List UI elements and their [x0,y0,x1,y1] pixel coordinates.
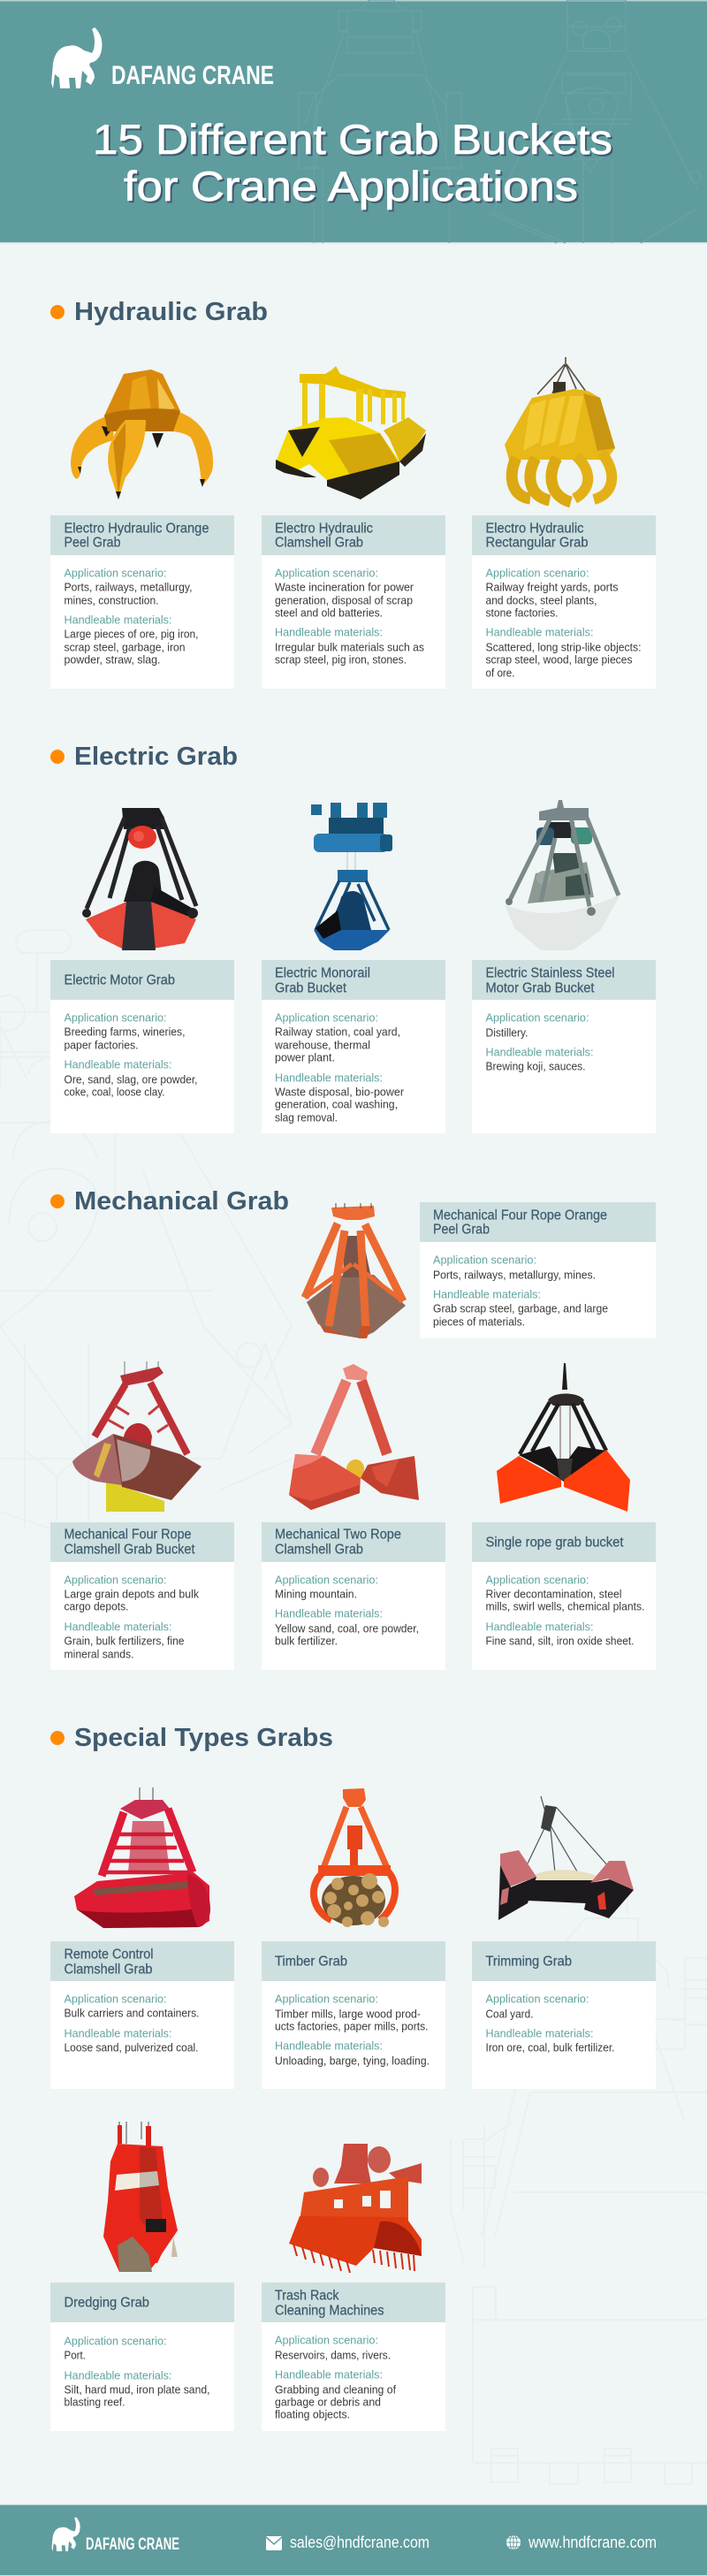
application scenario: Large grain depots and bulk [64,1588,199,1600]
card header [50,2283,234,2322]
application scenario: cargo depots. [64,1600,129,1612]
application scenario: Application scenario: [486,566,589,580]
handleable materials: Handleable materials: [275,2039,383,2053]
card header: Motor Grab Bucket [486,981,595,995]
illustration: remote control clamshell grab [74,1787,210,1928]
icon: globe [506,2535,521,2549]
card header [262,1941,445,1981]
application scenario: Reservoirs, dams, rivers. [275,2348,391,2362]
handleable materials: scrap steel, pig iron, stones. [275,652,407,667]
application scenario: Timber mills, large wood prod- [275,2007,421,2021]
handleable materials: Iron ore, coal, bulk fertilizer. [486,2040,615,2054]
application scenario [275,1993,428,2033]
card: Electro Hydraulic Clamshell Grab [262,515,445,689]
application scenario [486,1011,589,1040]
card header: Trash Rack [275,2288,339,2304]
application scenario [64,1574,199,1612]
card header: Electro Hydraulic Orange [64,522,209,536]
handleable materials: Ore, sand, slag, ore powder, [64,1073,198,1086]
card header: Electro Hydraulic [275,522,373,536]
card header: Mechanical Four Rope Orange [433,1208,607,1223]
application scenario: River decontamination, steel [486,1588,622,1600]
handleable materials: pieces of materials. [433,1315,525,1328]
application scenario: Waste incineration for power [275,580,414,594]
card header [262,1522,445,1562]
application scenario: mills, swirl wells, chemical plants. [486,1600,645,1612]
handleable materials [64,2026,198,2054]
card header: Electro Hydraulic [486,522,584,536]
application scenario: Application scenario: [486,1993,589,2005]
handleable materials: Handleable materials: [486,1045,594,1059]
application scenario: Application scenario: [486,1574,589,1586]
handleable materials: blasting reef. [64,2396,125,2408]
background watermark: right crane line drawing [451,1892,707,2484]
handleable materials: scrap steel, wood, large pieces [486,652,633,667]
application scenario [64,1993,200,2019]
handleable materials: Handleable materials: [433,1287,541,1301]
application scenario [275,566,414,619]
handleable materials: Handleable materials: [486,2026,594,2040]
card header [472,1522,656,1562]
card: Dredging Grab [50,2283,234,2431]
application scenario [275,2334,391,2362]
handleable materials: mineral sands. [64,1648,134,1660]
header logo [51,27,274,90]
application scenario: Distillery. [486,1025,528,1040]
handleable materials: bulk fertilizer. [275,1634,338,1648]
card header: Timber Grab [275,1954,347,1970]
handleable materials [275,2367,396,2420]
handleable materials: Handleable materials: [64,614,171,626]
handleable materials: Handleable materials: [64,1620,171,1634]
handleable materials: Handleable materials: [275,2367,383,2382]
application scenario: Railway station, coal yard, [275,1025,400,1038]
handleable materials: Waste disposal, bio-power [275,1086,405,1098]
brand name: DAFANG CRANE [86,2535,179,2554]
illustration: dredging grab [103,2122,178,2272]
card header [50,960,234,1000]
handleable materials: Irregular bulk materials such as [275,640,424,654]
handleable materials: Scattered, long strip-like objects: [486,640,642,654]
handleable materials [64,1057,198,1098]
application scenario: Ports, railways, metallurgy, mines. [433,1268,596,1282]
card header: Clamshell Grab Bucket [64,1542,195,1558]
application scenario: Mining mountain. [275,1588,357,1600]
handleable materials [275,626,424,667]
footer background [0,2504,707,2576]
card header: Clamshell Grab [64,1962,152,1977]
handleable materials [64,614,198,667]
handleable materials: generation, coal washing, [275,1098,398,1110]
heading: Mechanical Grab: Mechanical Grab [74,1187,289,1216]
handleable materials: slag removal. [275,1110,338,1124]
title: 15 Different Grab Buckets [93,116,612,163]
card header [262,515,445,555]
handleable materials: coke, coal, loose clay. [64,1086,164,1098]
card: Electro Hydraulic Rectangular Grab [472,515,656,689]
heading: Special Types Grabs: Special Types Grabs [74,1724,333,1752]
card header: Single rope grab bucket [486,1535,624,1551]
handleable materials: Handleable materials: [64,2026,171,2040]
card: Trash Rack Cleaning Machines [262,2283,445,2431]
application scenario [64,2334,166,2362]
card header [50,1522,234,1562]
icon: elephant [51,2517,80,2551]
illustration: single rope grab bucket [497,1363,630,1512]
illustration: trash rack cleaning machines [289,2144,422,2273]
heading: Electric Grab: Electric Grab [74,743,238,771]
application scenario [64,566,193,606]
card header: Rectangular Grab [486,536,589,550]
illustration: mechanical two rope clamshell grab [289,1364,419,1510]
card header: Peel Grab [433,1222,490,1238]
application scenario [275,1574,378,1600]
handleable materials: Grabbing and cleaning of [275,2383,396,2396]
illustration: mechanical four rope clamshell grab bucket [72,1361,201,1512]
handleable materials [64,1620,184,1660]
illustration: timber grab [314,1788,395,1927]
handleable materials: powder, straw, slag. [64,652,161,667]
handleable materials: Handleable materials: [275,626,383,638]
application scenario: Application scenario: [64,1011,166,1024]
card header: Trimming Grab [486,1954,572,1970]
card: Timber Grab [262,1941,445,2089]
handleable materials: of ore. [486,667,514,679]
card: Electro Hydraulic Orange Peel Grab [50,515,234,689]
application scenario: generation, disposal of scrap [275,594,413,606]
handleable materials [275,1607,419,1648]
handleable materials: Handleable materials: [486,626,594,638]
application scenario: Port. [64,2348,86,2362]
application scenario: Coal yard. [486,2007,534,2021]
application scenario [274,1011,400,1064]
handleable materials: Yellow sand, coal, ore powder, [275,1621,419,1635]
application scenario: Bulk carriers and containers. [64,2007,200,2019]
handleable materials: Unloading, barge, tying, loading. [275,2054,430,2067]
card: Mechanical Two Rope Clamshell Grab [262,1522,445,1670]
card header: Grab Bucket [275,981,347,995]
application scenario: stone factories. [486,606,559,619]
card: Trimming Grab [472,1941,656,2089]
application scenario: Application scenario: [64,2334,166,2348]
card: Electric Monorail Grab Bucket [262,960,445,1133]
handleable materials: Handleable materials: [275,1071,383,1084]
card header [262,2283,445,2322]
card header: Clamshell Grab [275,536,363,550]
application scenario: steel and old batteries. [275,606,383,619]
card: Electric Motor Grab [50,960,234,1133]
application scenario: Application scenario: [275,1993,378,2005]
header watermark: grab line drawing [299,0,701,243]
icon: envelope [266,2536,282,2550]
card: Mechanical Four Rope Clamshell Grab Bucket [50,1522,234,1670]
application scenario: Application scenario: [275,1011,378,1024]
handleable materials [64,2369,210,2408]
card header [472,1941,656,1981]
application scenario: Application scenario: [64,1574,166,1586]
handleable materials: floating objects. [275,2408,350,2420]
application scenario: warehouse, thermal [274,1038,370,1052]
handleable materials: scrap steel, garbage, iron [64,640,186,654]
card header: Cleaning Machines [275,2304,384,2318]
card header: Electric Stainless Steel [486,965,615,981]
card header [262,960,445,1000]
heading: Hydraulic Grab: Hydraulic Grab [74,298,268,326]
card header: Peel Grab [64,536,120,550]
footer logo [51,2517,179,2554]
card header: Remote Control [64,1947,154,1962]
illustration: electric monorail grab bucket [311,803,392,950]
handleable materials: Brewing koji, sauces. [486,1059,585,1073]
card header [472,960,656,1000]
application scenario: mines, construction. [64,594,159,606]
card header [50,1941,234,1981]
illustration: electric stainless steel motor grab bucket [505,800,620,950]
application scenario: ucts factories, paper mills, ports. [275,2019,428,2033]
application scenario [486,566,619,619]
illustration: electric motor grab [82,808,198,950]
application scenario: Application scenario: [275,1574,378,1586]
application scenario: Application scenario: [64,566,166,580]
handleable materials [486,1045,594,1073]
handleable materials [275,1071,405,1124]
handleable materials: Large pieces of ore, pig iron, [64,628,198,640]
card: Remote Control Clamshell Grab [50,1941,234,2089]
card: Electric Stainless Steel Motor Grab Bucket [472,960,656,1133]
contact: email: sales@hndfcrane.com [290,2534,430,2551]
background watermark: left crane line drawing [0,930,292,1538]
card header [472,515,656,555]
handleable materials: Grain, bulk fertilizers, fine [64,1634,184,1648]
handleable materials: garbage or debris and [275,2396,381,2408]
handleable materials [275,2039,430,2067]
card: Mechanical Four Rope Orange Peel Grab [420,1202,656,1338]
application scenario: Application scenario: [433,1254,536,1266]
handleable materials: Loose sand, pulverized coal. [64,2040,198,2054]
handleable materials: Fine sand, silt, iron oxide sheet. [486,1634,635,1648]
application scenario: Application scenario: [275,566,378,580]
application scenario [64,1011,186,1052]
handleable materials [486,1620,635,1648]
handleable materials: Handleable materials: [64,1057,171,1071]
application scenario: and docks, steel plants, [486,594,597,606]
title: for Crane Applications [124,163,578,210]
header banner [0,0,707,244]
card header [420,1202,656,1242]
card: Single rope grab bucket [472,1522,656,1670]
handleable materials: Silt, hard mud, iron plate sand, [64,2383,210,2396]
handleable materials [486,2026,615,2054]
illustration: electro hydraulic clamshell grab [276,366,426,499]
application scenario: Railway freight yards, ports [486,580,619,594]
illustration: trimming grab [498,1796,634,1920]
application scenario [486,1574,645,1612]
application scenario: Application scenario: [64,1993,166,2005]
card header: Electric Motor Grab [64,972,175,988]
application scenario: Application scenario: [275,2334,378,2346]
header background [0,0,707,243]
card header [50,515,234,555]
icon: elephant [51,27,103,88]
handleable materials [433,1287,608,1328]
brand name: DAFANG CRANE [111,61,274,90]
title [93,116,612,210]
application scenario: paper factories. [64,1038,138,1052]
card header: Clamshell Grab [275,1542,363,1558]
illustration: electro hydraulic orange peel grab [71,370,213,499]
application scenario: Application scenario: [486,1011,589,1024]
application scenario: power plant. [275,1050,335,1064]
contact: website: www.hndfcrane.com [528,2534,657,2551]
handleable materials: Handleable materials: [486,1620,594,1634]
application scenario: Ports, railways, metallurgy, [64,580,193,594]
card header: Mechanical Two Rope [275,1528,401,1542]
card header: Mechanical Four Rope [64,1528,191,1542]
application scenario [433,1254,596,1282]
application scenario: Breeding farms, wineries, [64,1025,186,1038]
handleable materials: Handleable materials: [275,1607,383,1620]
footer [0,2504,707,2576]
illustration: electro hydraulic rectangular grab [505,357,615,502]
handleable materials [486,626,642,679]
application scenario [486,1993,589,2021]
card header: Electric Monorail [275,965,370,981]
handleable materials: Handleable materials: [64,2369,171,2382]
illustration: mechanical four rope orange peel grab [305,1203,406,1338]
card header: Dredging Grab [64,2295,149,2311]
handleable materials: Grab scrap steel, garbage, and large [433,1301,608,1315]
